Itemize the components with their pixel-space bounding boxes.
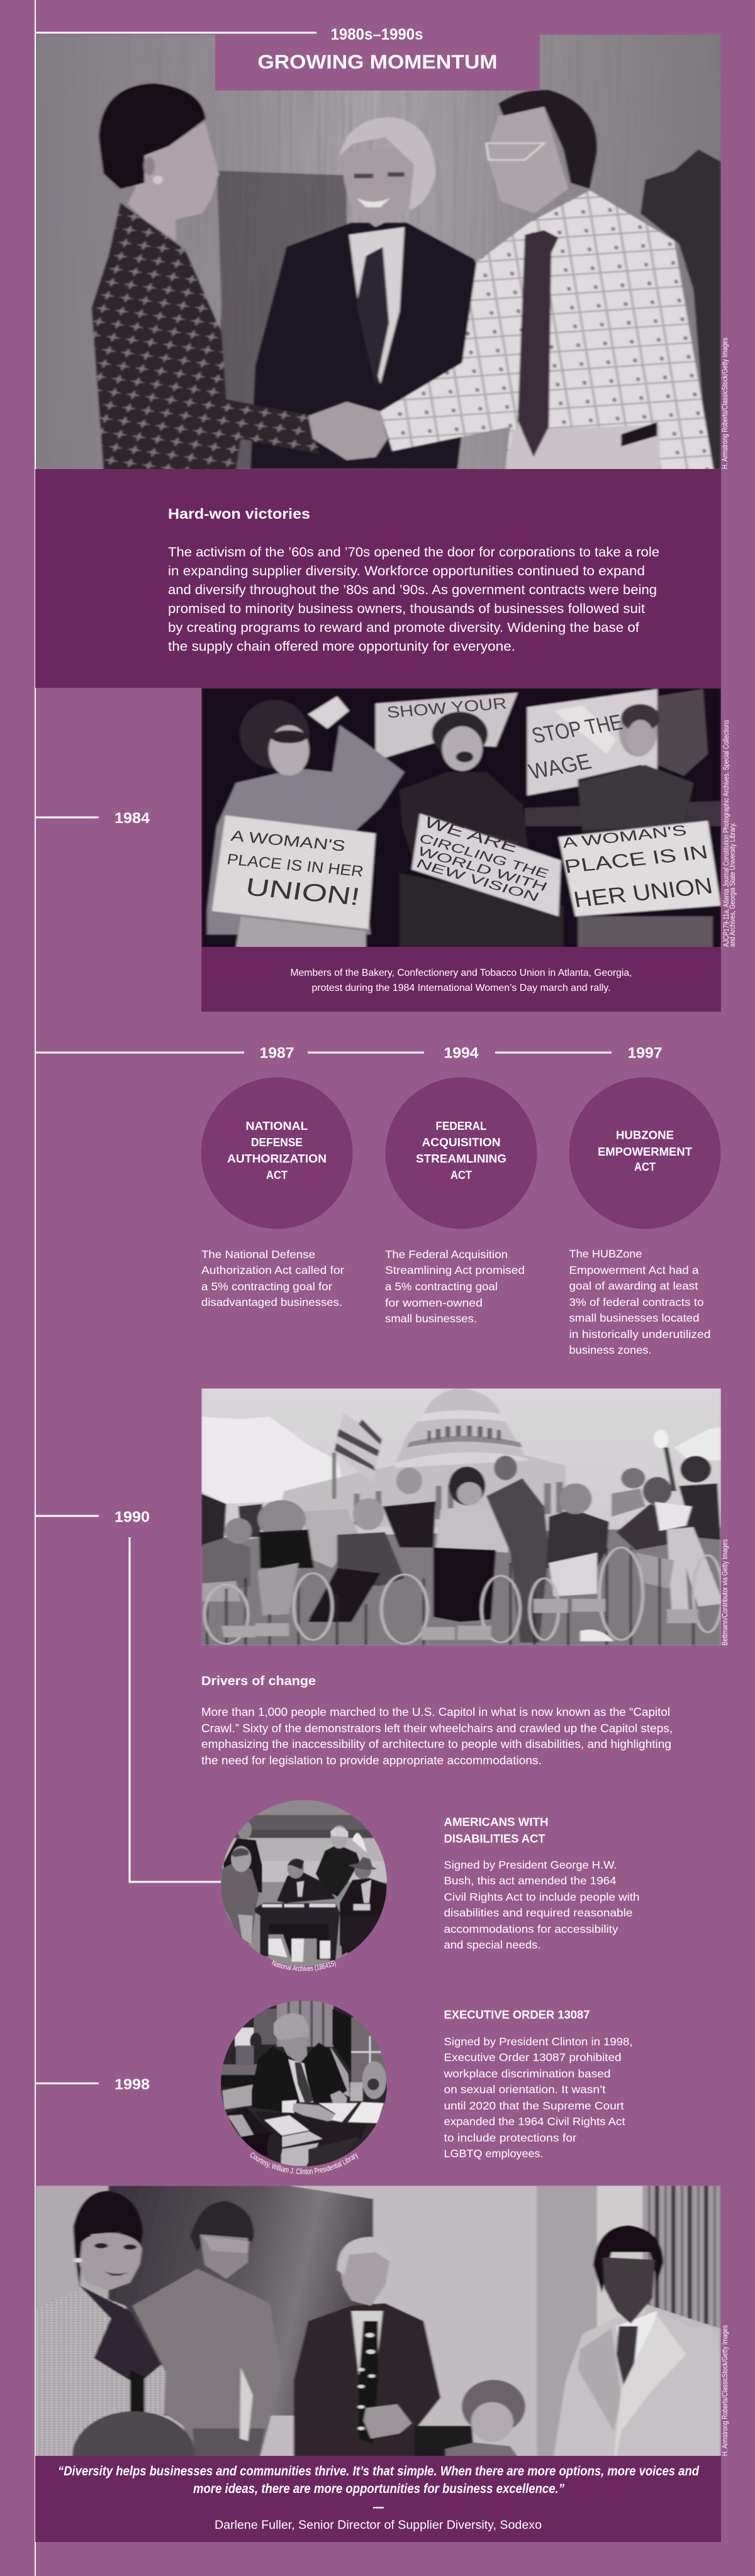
body text: and diversify throughout the ’80s and ’90s. As government contracts were being	[168, 583, 657, 597]
sign lettering: A WOMAN'S	[230, 827, 347, 855]
text: HUBZone description: business zones.	[569, 1344, 652, 1356]
circle: HUBZone Empowerment Act: EMPOWERMENT	[598, 1145, 693, 1158]
desk	[255, 1903, 340, 1960]
woman	[91, 202, 319, 471]
attribution: Darlene Fuller, Senior Director of Supplier Diversity, Sodexo	[215, 2519, 542, 2532]
hands	[293, 2103, 335, 2122]
body text: Crawl.” Sixty of the demonstrators left their wheelchairs and crawled up the Capitol steps,	[201, 1722, 673, 1735]
heading: Hard-won victories	[168, 506, 310, 522]
section: drivers of change	[201, 1674, 673, 1767]
1984 marker: 1984	[115, 810, 150, 827]
heading	[444, 1816, 549, 1845]
wheelchairs and steps	[207, 1547, 693, 1645]
credit: union photo: AJCP179-11a, Atlanta Journal Constitution Photographic Archives. Special Collections	[723, 720, 730, 947]
text: HUBZone description: 3% of federal contracts to	[569, 1296, 703, 1308]
body text: emphasizing the inaccessibility of architecture to people with disabilities, and highlighting	[201, 1737, 671, 1750]
credit: group photo: H. Armstrong Roberts/ClassicStock/Getty Images	[720, 2325, 729, 2456]
documents	[319, 2103, 357, 2122]
sign lettering: WAGE	[526, 749, 595, 784]
body text: in expanding supplier diversity. Workforce opportunities continued to expand	[168, 564, 645, 578]
photo: Clinton signing	[220, 1998, 388, 2168]
text: National Defense description: a 5% contracting goal for	[201, 1280, 332, 1293]
text: National Defense description: Authorization Act called for	[201, 1264, 344, 1276]
circle: Federal Acquisition Streamlining Act	[385, 1078, 537, 1229]
text: National Defense description: disadvantaged businesses.	[201, 1296, 342, 1308]
text: HUBZone description: The HUBZone	[569, 1247, 642, 1260]
circle: National Defense Authorization Act	[201, 1078, 352, 1229]
body text: to include protections for	[444, 2131, 577, 2144]
photo: ADA signing	[220, 1798, 388, 1968]
text: HUBZone description: in historically underutilized	[569, 1328, 711, 1341]
body text	[443, 2035, 633, 2160]
body text: Executive Order 13087 prohibited	[444, 2051, 622, 2064]
plant	[640, 150, 721, 469]
right man	[381, 191, 713, 469]
seated woman	[414, 2426, 474, 2457]
body text: promised to minority business owners, thousands of businesses followed suit	[168, 602, 645, 616]
body text: accommodations for accessibility	[444, 1923, 618, 1935]
circle: Federal Acquisition Streamlining Act: FEDERAL	[435, 1119, 487, 1132]
period label: 1980s–1990s	[331, 26, 423, 43]
body text: the need for legislation to provide appropriate accommodations.	[201, 1754, 542, 1767]
quote panel: more ideas, there are more opportunities for business excellence.”	[193, 2482, 564, 2496]
text: Federal Acquisition description: for women-owned	[385, 1296, 483, 1309]
header rule	[35, 31, 316, 34]
body text: Signed by President Clinton in 1998,	[444, 2035, 633, 2048]
circle: HUBZone Empowerment Act: ACT	[634, 1160, 656, 1173]
suit	[252, 2042, 347, 2111]
ground mass	[201, 1527, 721, 1645]
circle: HUBZone Empowerment Act: HUBZONE	[616, 1128, 674, 1142]
1990 marker	[35, 1509, 150, 1525]
heading: EXECUTIVE ORDER 13087	[444, 2008, 590, 2021]
body text: workplace discrimination based	[443, 2067, 610, 2080]
body text: until 2020 that the Supreme Court	[444, 2099, 624, 2112]
hatted man	[340, 1878, 387, 1954]
dash	[373, 2507, 384, 2509]
sign lettering: WORLD WITH	[415, 844, 550, 893]
text: Federal Acquisition description: small businesses.	[385, 1312, 477, 1325]
photo: union protest with signs	[201, 688, 721, 949]
sign lettering: WE ARE	[421, 814, 522, 856]
body text: on sexual orientation. It wasn’t	[444, 2083, 606, 2096]
centre man	[294, 2303, 440, 2457]
body text	[201, 1705, 673, 1767]
sign lettering: CIRCLING THE	[417, 831, 551, 881]
year labels: 1987	[259, 1045, 294, 1061]
credit: union photo	[723, 720, 737, 947]
body text	[444, 1859, 639, 1951]
text: HUBZone description	[569, 1247, 711, 1356]
circle: National Defense Authorization Act: ACT	[266, 1168, 288, 1181]
text: National Defense description: The National Defense	[201, 1248, 315, 1261]
vertical timeline line	[35, 0, 36, 2576]
text: HUBZone description: Empowerment Act had a	[569, 1264, 699, 1276]
woman left	[207, 725, 405, 934]
1998 marker: 1998	[115, 2076, 150, 2093]
body text: expanded the 1964 Civil Rights Act	[444, 2115, 625, 2128]
body text: Civil Rights Act to include people with	[444, 1891, 639, 1903]
caption panel	[201, 947, 721, 1012]
sign lettering: STOP THE	[529, 710, 625, 748]
sign right	[559, 821, 721, 917]
credit: National Archives: National Archives (186415)	[272, 1960, 336, 1972]
text: Executive Order 13087	[443, 2008, 633, 2160]
body text	[168, 545, 659, 654]
body text: by creating programs to reward and promote diversity. Widening the base of	[168, 621, 639, 635]
dome	[274, 1388, 566, 1527]
man on the right	[554, 2311, 721, 2457]
heading: Drivers of change	[201, 1674, 316, 1688]
head in foreground	[72, 2411, 196, 2501]
seated man left	[221, 1863, 259, 1945]
sign middle	[411, 814, 561, 917]
circle: Federal Acquisition Streamlining Act: STREAMLINING	[416, 1152, 506, 1165]
man with glasses	[132, 2269, 282, 2457]
credit: first photo: H. Armstrong Roberts/ClassicStock/Getty Images	[720, 338, 729, 469]
1990 marker: 1990	[115, 1509, 150, 1525]
columns	[354, 1482, 563, 1525]
body text: and special needs.	[444, 1938, 541, 1951]
text: HUBZone description: goal of awarding at least	[569, 1280, 698, 1292]
sign lettering: PLACE IS IN HER	[226, 851, 365, 880]
1998 marker	[35, 2076, 150, 2093]
photo: disability rights march at the Capitol	[201, 1388, 722, 1645]
sign lettering: NEW VISION	[414, 856, 542, 904]
body text: Signed by President George H.W.	[444, 1859, 617, 1871]
caption panel: protest during the 1984 International Women’s Day march and rally.	[312, 983, 610, 993]
crowd	[201, 1494, 226, 1547]
president	[277, 1872, 335, 1903]
title: GROWING MOMENTUM	[258, 50, 497, 73]
circle: National Defense Authorization Act: AUTHORIZATION	[227, 1152, 327, 1165]
sign lettering	[226, 695, 715, 912]
caption panel: Members of the Bakery, Confectionery and Tobacco Union in Atlanta, Georgia,	[291, 968, 632, 978]
body text: disabilities and required reasonable	[444, 1906, 633, 1919]
circle: HUBZone Empowerment Act	[569, 1078, 721, 1229]
photo: three people shaking hands	[35, 35, 721, 471]
timeline rule 1987 1994 1997	[35, 1051, 612, 1054]
sign lettering: PLACE IS IN	[562, 842, 710, 877]
text: National Defense description	[201, 1248, 344, 1308]
credit: Capitol photo: Bettmann/Contributor via Getty Images	[720, 1539, 729, 1645]
credit: Clinton Library: Courtesy, William J. Clinton Presidential Library	[250, 2153, 358, 2174]
credit: union photo: and Archives, Georgia State University Library.	[729, 822, 737, 947]
heading: AMERICANS WITH	[444, 1816, 549, 1828]
body text: Bush, this act amended the 1964	[444, 1874, 617, 1887]
woman right	[578, 765, 693, 830]
year labels	[259, 1045, 662, 1061]
panel: hard-won victories	[35, 469, 721, 688]
text: Federal Acquisition description: Streamlining Act promised	[385, 1264, 525, 1276]
text: HUBZone description: small businesses located	[569, 1312, 700, 1324]
body text: The activism of the ’60s and ’70s opened the door for corporations to take a role	[168, 545, 659, 560]
circle: National Defense Authorization Act: NATIONAL	[245, 1119, 308, 1132]
standing man left	[223, 1838, 262, 1893]
circle: Federal Acquisition Streamlining Act: ACT	[450, 1168, 473, 1181]
text: Americans with Disabilities Act	[444, 1816, 639, 1951]
heading: DISABILITIES ACT	[444, 1832, 545, 1845]
body text: More than 1,000 people marched to the U.S. Capitol in what is now known as the “Capitol	[201, 1705, 670, 1718]
sign lettering: SHOW YOUR	[386, 695, 508, 722]
flag	[335, 1415, 383, 1471]
sign lettering: UNION!	[243, 873, 362, 910]
title block	[215, 26, 540, 91]
photo: group of five	[35, 2186, 721, 2501]
lamp post	[664, 1447, 676, 1491]
year labels: 1994	[444, 1045, 479, 1061]
1984 marker	[35, 810, 150, 827]
sign lettering: HER UNION	[572, 873, 715, 912]
year labels: 1997	[628, 1045, 662, 1061]
sign left	[212, 815, 376, 929]
quote panel	[35, 2456, 721, 2542]
circle: National Defense Authorization Act: DEFENSE	[251, 1136, 303, 1149]
text: Federal Acquisition description: The Federal Acquisition	[385, 1248, 508, 1261]
connector from 1990 to ADA photo	[130, 1537, 221, 1882]
body text: LGBTQ employees.	[444, 2147, 544, 2160]
hair and face	[273, 2013, 309, 2041]
centre man	[250, 223, 481, 469]
woman middle	[400, 772, 530, 862]
sign lettering: A WOMAN'S	[561, 822, 688, 851]
circle: Federal Acquisition Streamlining Act: ACQUISITION	[422, 1136, 501, 1149]
text: Federal Acquisition description: a 5% contracting goal	[385, 1280, 498, 1293]
body text: the supply chain offered more opportunity for everyone.	[168, 639, 515, 654]
text: Federal Acquisition description	[385, 1248, 525, 1325]
hands	[308, 402, 388, 460]
woman with scarf	[73, 2191, 143, 2288]
woman standing	[316, 1844, 360, 1897]
